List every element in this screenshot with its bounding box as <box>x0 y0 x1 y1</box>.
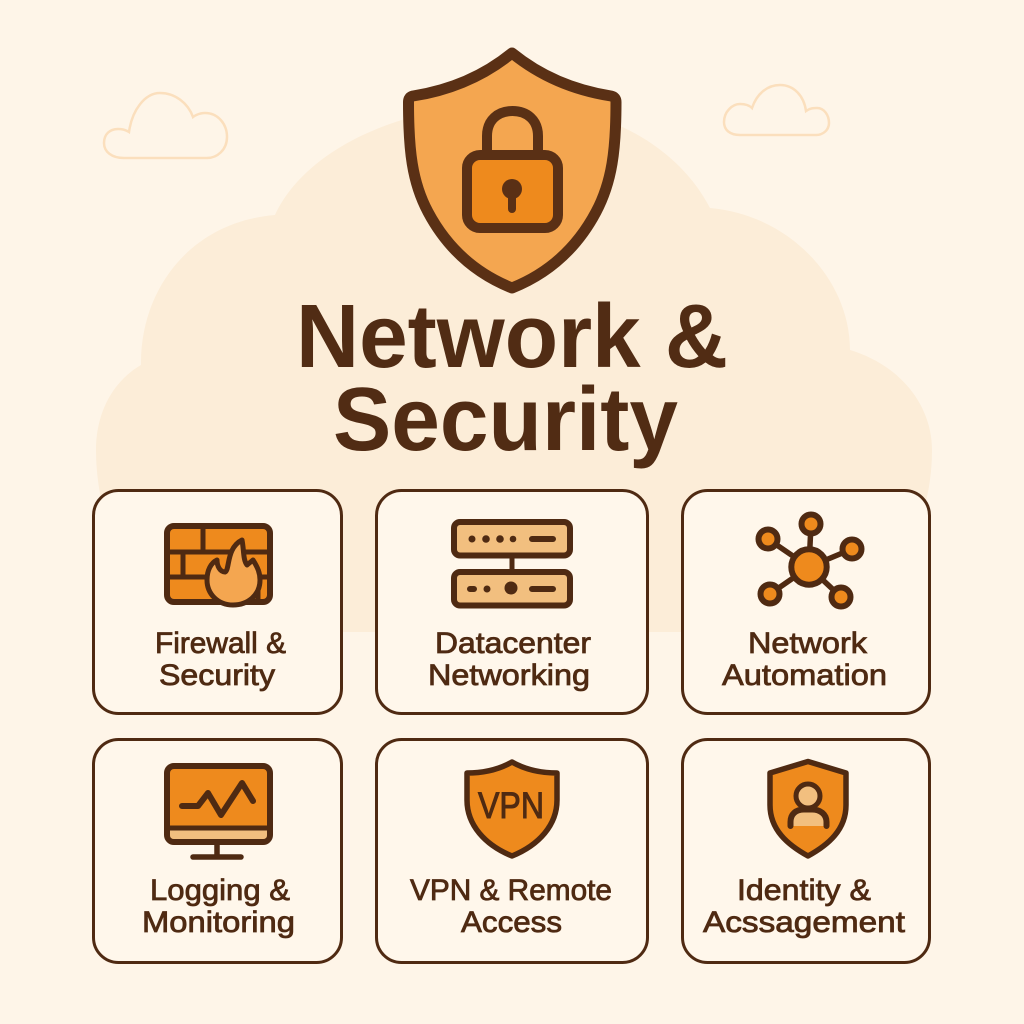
icon: VPN shield <box>467 762 557 856</box>
label <box>703 874 906 939</box>
large background cloud <box>96 104 932 632</box>
label: Networking <box>428 659 590 692</box>
label <box>142 874 295 939</box>
label: Identity & <box>737 874 871 907</box>
icon: firewall with flame <box>166 526 270 605</box>
label: VPN & Remote <box>410 874 612 907</box>
label <box>428 627 591 692</box>
panel: Datacenter Networking <box>376 490 648 714</box>
panel: Identity & Access Management <box>682 740 930 962</box>
label: Monitoring <box>142 906 295 939</box>
label: Firewall & <box>155 627 286 660</box>
label: Network <box>748 627 868 660</box>
label <box>410 874 612 939</box>
title <box>296 287 728 470</box>
panel: Network Automation <box>682 490 930 714</box>
panel: Logging & Monitoring <box>94 740 342 962</box>
label: Datacenter <box>435 627 591 660</box>
label: Access <box>461 906 562 939</box>
panel: Firewall & Security <box>94 490 342 714</box>
label <box>722 627 887 692</box>
label <box>155 627 286 692</box>
icon: server rack <box>454 522 570 606</box>
title: Security <box>333 370 678 470</box>
hero shield with padlock <box>408 53 616 288</box>
icon: network nodes <box>758 514 862 606</box>
icon: VPN shield: VPN <box>478 785 544 826</box>
label: Automation <box>722 659 887 692</box>
icon: monitor with chart <box>166 766 270 857</box>
label: Logging & <box>150 874 290 907</box>
icon: identity shield <box>770 762 846 856</box>
label: Acssagement <box>703 906 906 939</box>
title: Network & <box>296 287 728 387</box>
panel: VPN & Remote Access <box>376 740 648 962</box>
label: Security <box>159 659 275 692</box>
small cloud left <box>104 93 227 158</box>
small cloud right <box>724 85 829 135</box>
